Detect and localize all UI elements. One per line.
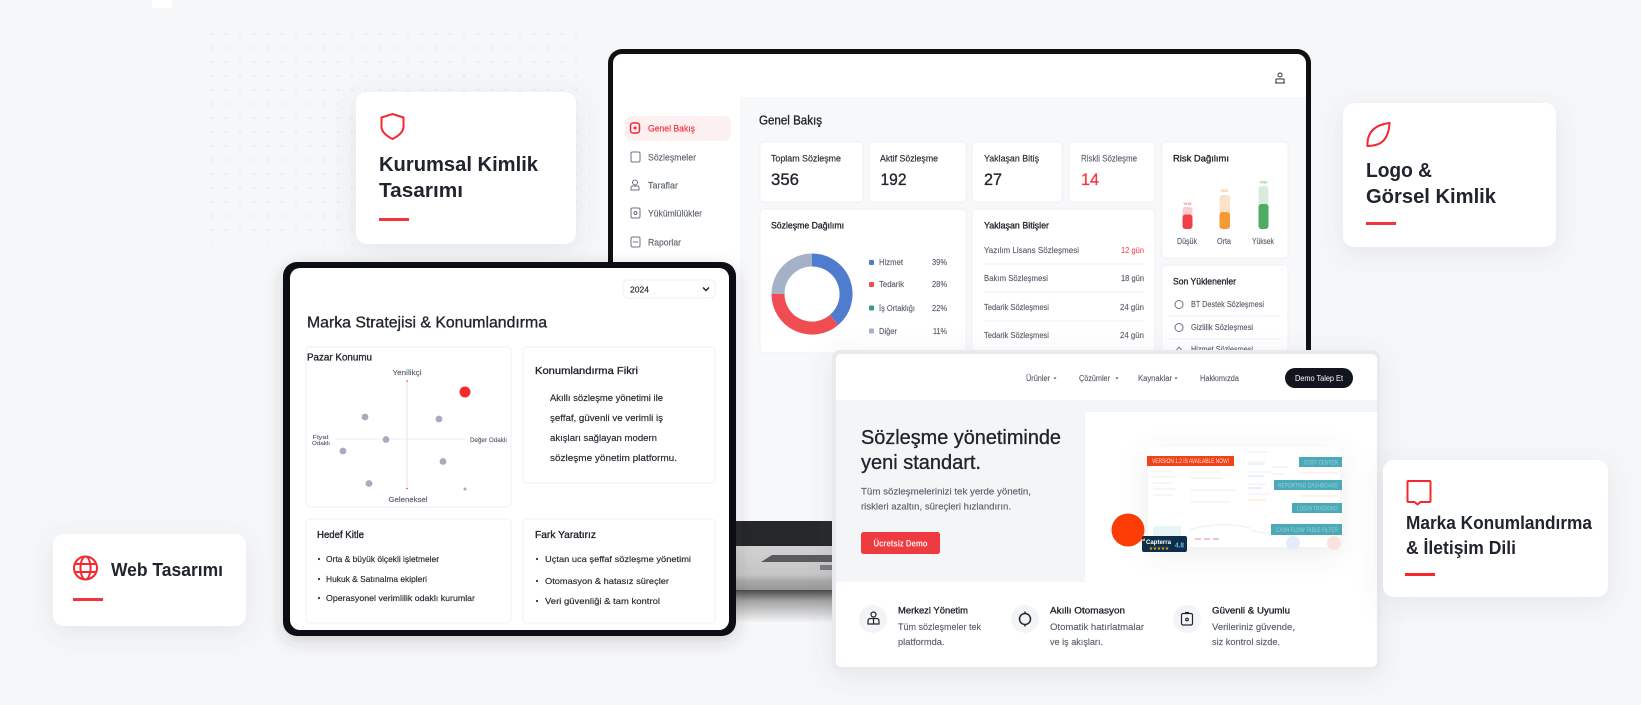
panel: Yaklaşan Bitişler: 24 gün <box>1120 302 1144 312</box>
panel: Son Yüklenenler: Son Yüklenenler <box>1173 276 1236 288</box>
panel: Fark Yaratırız: Otomasyon & hatasız süreçler <box>545 576 669 586</box>
bar: Yüksek: Yüksek <box>1252 237 1275 246</box>
bar: Orta: %32 <box>1220 188 1229 193</box>
icon: globe <box>74 556 97 580</box>
panel: Hedef Kitle: Operasyonel verimlilik odaklı kurumlar <box>326 593 475 603</box>
panel: Konumlandırma Fikri: şeffaf, güvenli ve verimli iş <box>550 413 664 423</box>
stat: Riskli Sözleşme: 14 <box>1081 170 1099 189</box>
card title: Marka Konumlandırma <box>1406 513 1593 533</box>
year selector: 2024 <box>630 284 649 294</box>
donut chart <box>778 260 846 328</box>
card: Marka Konumlandırma & İletişim Dili <box>1383 460 1608 597</box>
panel: Yaklaşan Bitişler: 24 gün <box>1120 330 1144 340</box>
card title line 2: & İletişim Dili <box>1406 538 1516 558</box>
positioning chart: Geleneksel <box>388 495 428 504</box>
button: Demo Talep Et <box>1285 368 1353 388</box>
feature: Akıllı Otomasyon: Akıllı Otomasyon <box>1050 606 1125 616</box>
nav: Sözleşmeler: Sözleşmeler <box>648 152 696 163</box>
hero heading: Sözleşme yönetiminde <box>861 427 1061 449</box>
card title: Web Tasarımı <box>111 560 223 580</box>
stat: Yaklaşan Bitiş <box>972 142 1062 202</box>
feature: Güvenli & Uyumlu: Verileriniz güvende, <box>1212 622 1295 632</box>
button: Ücretsiz Demo: Ücretsiz Demo <box>874 538 928 548</box>
panel: Fark Yaratırız: Fark Yaratırız <box>535 530 596 541</box>
panel: Son Yüklenenler: Hizmet Sözleşmesi <box>1191 345 1253 354</box>
hero text line 2: riskleri azaltın, süreçleri hızlandırın. <box>861 502 1011 512</box>
panel: Pazar Konumu: Pazar Konumu <box>307 352 372 364</box>
card: Kurumsal Kimlik Tasarımı <box>356 92 576 244</box>
tag: cost center <box>1299 457 1342 467</box>
screenshot details <box>1153 452 1280 533</box>
icon: shield <box>382 114 404 139</box>
legend: İş Ortaklığı <box>879 304 915 313</box>
top navigation <box>1026 374 1240 383</box>
nav: Taraflar: Taraflar <box>648 180 678 191</box>
website screen <box>836 354 1377 667</box>
feature: Akıllı Otomasyon: Otomatik hatırlatmalar <box>1050 622 1144 632</box>
panel: Sözleşme Dağılımı: Sözleşme Dağılımı <box>771 220 844 232</box>
stat: Aktif Sözleşme <box>869 142 966 202</box>
accent underline <box>1405 573 1435 576</box>
panel: Hedef Kitle: Hedef Kitle <box>317 530 364 541</box>
capterra badge: ★★★★★ <box>1149 546 1169 552</box>
bar: Düşük: %18 <box>1183 201 1192 206</box>
banner: version <box>1147 456 1234 466</box>
nav: Raporlar: Raporlar <box>648 237 681 248</box>
website mockup <box>832 350 1380 670</box>
tag: login tracking <box>1292 503 1342 513</box>
legend: Hizmet <box>879 258 904 267</box>
panel: Sözleşme Dağılımı <box>760 209 966 353</box>
card: Web Tasarımı <box>53 534 246 626</box>
tablet heading: Marka Stratejisi & Konumlandırma <box>307 314 547 332</box>
panel: Son Yüklenenler <box>1162 265 1288 365</box>
accent underline <box>1366 222 1396 225</box>
website frame <box>832 350 1380 670</box>
tag: login tracking: LOGIN TRACKING <box>1297 506 1338 512</box>
button: Ücretsiz Demo <box>861 532 940 554</box>
user icon <box>1275 73 1285 83</box>
tag: cash flow: CASH-FLOW TABLE FILTER <box>1276 528 1339 534</box>
sidebar navigation <box>625 116 731 248</box>
panel: Yaklaşan Bitişler: Yazılım Lisans Sözleşmesi <box>984 245 1079 255</box>
stat: Toplam Sözleşme: 356 <box>771 170 799 189</box>
stat: Toplam Sözleşme: Toplam Sözleşme <box>771 154 841 164</box>
panel: Yaklaşan Bitişler: Tedarik Sözleşmesi <box>984 330 1049 340</box>
tablet frame <box>283 262 736 636</box>
panel: Yaklaşan Bitişler: 12 gün <box>1121 245 1144 255</box>
legend: 11% <box>933 327 947 336</box>
panel: Konumlandırma Fikri: sözleşme yönetim platformu. <box>550 453 677 463</box>
tablet screen <box>290 268 729 630</box>
year selector <box>623 280 715 298</box>
tag: cost center: COST CENTER <box>1304 460 1339 466</box>
feature: Merkezi Yönetim <box>859 605 981 647</box>
bar: Yüksek <box>1252 180 1275 246</box>
legend: Diğer <box>879 327 897 336</box>
stat: Aktif Sözleşme: 192 <box>880 170 906 189</box>
panel: Yaklaşan Bitişler: Yaklaşan Bitişler <box>984 220 1049 232</box>
monitor frame <box>608 49 1311 546</box>
bar: Yüksek: %50 <box>1259 180 1268 184</box>
top white tab <box>152 0 172 8</box>
stat: Yaklaşan Bitiş: 27 <box>984 170 1002 189</box>
panel: Fark Yaratırız <box>523 519 715 623</box>
panel: Son Yüklenenler: Gizlilik Sözleşmesi <box>1191 323 1253 332</box>
orange circle <box>1112 514 1144 546</box>
stat: Toplam Sözleşme <box>760 142 863 202</box>
panel: Yaklaşan Bitişler <box>972 209 1155 369</box>
main content background <box>740 97 1306 521</box>
bar: Orta: Orta <box>1217 237 1231 246</box>
panel: Yaklaşan Bitişler: Tedarik Sözleşmesi <box>984 302 1049 312</box>
hero text: Tüm sözleşmelerinizi tek yerde yönetin, <box>861 486 1031 498</box>
tablet: brand strategy <box>283 262 736 636</box>
bar: Düşük: Düşük <box>1177 237 1198 246</box>
panel: Konumlandırma Fikri <box>523 347 715 483</box>
capterra badge: Capterra <box>1146 539 1171 546</box>
dashboard heading: Genel Bakış <box>759 114 822 128</box>
legend <box>869 258 947 336</box>
top navigation: Ürünler <box>1026 374 1050 383</box>
card title line 2: Tasarımı <box>379 180 463 202</box>
positioning chart <box>312 368 507 504</box>
bar: Orta <box>1217 188 1231 246</box>
legend: 39% <box>932 258 947 267</box>
feature: Akıllı Otomasyon <box>1011 605 1144 647</box>
feature: Güvenli & Uyumlu: siz kontrol sizde. <box>1212 637 1280 647</box>
monitor screen <box>613 54 1306 521</box>
panel: Konumlandırma Fikri: akışları sağlayan modern <box>550 433 657 443</box>
card title line 2: Görsel Kimlik <box>1366 186 1497 208</box>
capterra badge: 4.8 <box>1175 542 1184 550</box>
tag: cash flow <box>1271 524 1342 535</box>
legend: Tedarik <box>879 280 905 289</box>
panel: Yaklaşan Bitişler: 18 gün <box>1121 273 1144 283</box>
stat: Yaklaşan Bitiş: Yaklaşan Bitiş <box>984 154 1039 164</box>
panel: Hedef Kitle <box>306 519 511 623</box>
hero background <box>836 400 1377 582</box>
monitor stand and keyboard <box>736 521 832 622</box>
tag: reporting dashboard: REPORTING DASHBOARD <box>1278 484 1339 490</box>
panel: Son Yüklenenler: BT Destek Sözleşmesi <box>1191 300 1264 309</box>
feature: Akıllı Otomasyon: ve iş akışları. <box>1050 637 1103 647</box>
top navigation: Hakkımızda <box>1200 374 1240 383</box>
bar: Düşük <box>1177 201 1198 246</box>
panel: Fark Yaratırız: Veri güvenliği & tam kontrol <box>545 596 660 606</box>
feature: Merkezi Yönetim: Tüm sözleşmeler tek <box>898 622 981 632</box>
positioning chart: Odaklı <box>312 441 330 447</box>
positioning chart: Değer Odaklı <box>470 437 507 444</box>
feature: Güvenli & Uyumlu: Güvenli & Uyumlu <box>1212 606 1290 616</box>
feature: Güvenli & Uyumlu <box>1173 605 1295 647</box>
positioning chart: Fiyat <box>312 435 329 441</box>
active nav item <box>625 116 731 141</box>
banner: version: VERSION 1.2 IS AVAILABLE NOW! <box>1152 458 1229 465</box>
legend: 28% <box>932 280 947 289</box>
capterra badge <box>1140 536 1187 552</box>
product screenshot <box>1147 447 1342 550</box>
legend: 22% <box>932 304 947 313</box>
icon: leaf <box>1367 123 1390 146</box>
panel: Konumlandırma Fikri: Konumlandırma Fikri <box>535 365 638 377</box>
feature: Merkezi Yönetim: platformda. <box>898 637 944 647</box>
tag: reporting dashboard <box>1274 480 1342 490</box>
panel: Hedef Kitle: Orta & büyük ölçekli işletmeler <box>326 554 439 564</box>
panel: Hedef Kitle: Hukuk & Satınalma ekipleri <box>326 574 427 584</box>
nav: Yükümlülükler: Yükümlülükler <box>648 208 702 219</box>
top navigation: Çözümler <box>1079 374 1110 383</box>
panel: Fark Yaratırız: Uçtan uca şeffaf sözleşme yönetimi <box>545 554 691 564</box>
panel: Risk Dağılımı: Risk Dağılımı <box>1173 154 1229 164</box>
hero heading line 2: yeni standart. <box>861 452 981 474</box>
stat: Riskli Sözleşme <box>1069 142 1155 202</box>
accent underline <box>73 598 103 601</box>
accent underline <box>379 218 409 221</box>
desktop monitor dashboard <box>608 49 1311 622</box>
top navigation: Kaynaklar <box>1138 374 1172 383</box>
stat: Aktif Sözleşme: Aktif Sözleşme <box>880 154 938 164</box>
panel: Yaklaşan Bitişler: Bakım Sözleşmesi <box>984 273 1048 283</box>
dot pattern <box>210 32 590 244</box>
panel: Konumlandırma Fikri: Akıllı sözleşme yönetimi ile <box>550 393 663 403</box>
panel: Pazar Konumu <box>306 347 511 507</box>
button: Demo Talep Et: Demo Talep Et <box>1295 373 1344 383</box>
icon: speech bubble <box>1408 481 1430 504</box>
stat: Riskli Sözleşme: Riskli Sözleşme <box>1081 154 1137 164</box>
card title: Kurumsal Kimlik <box>379 154 539 176</box>
panel: Risk Dağılımı <box>1162 142 1288 258</box>
positioning chart: Yenilikçi <box>392 368 422 377</box>
nav: Genel Bakış: Genel Bakış <box>648 123 695 134</box>
feature: Merkezi Yönetim: Merkezi Yönetim <box>898 606 968 616</box>
card: Logo & Görsel Kimlik <box>1343 103 1556 247</box>
card title: Logo & <box>1366 160 1432 182</box>
